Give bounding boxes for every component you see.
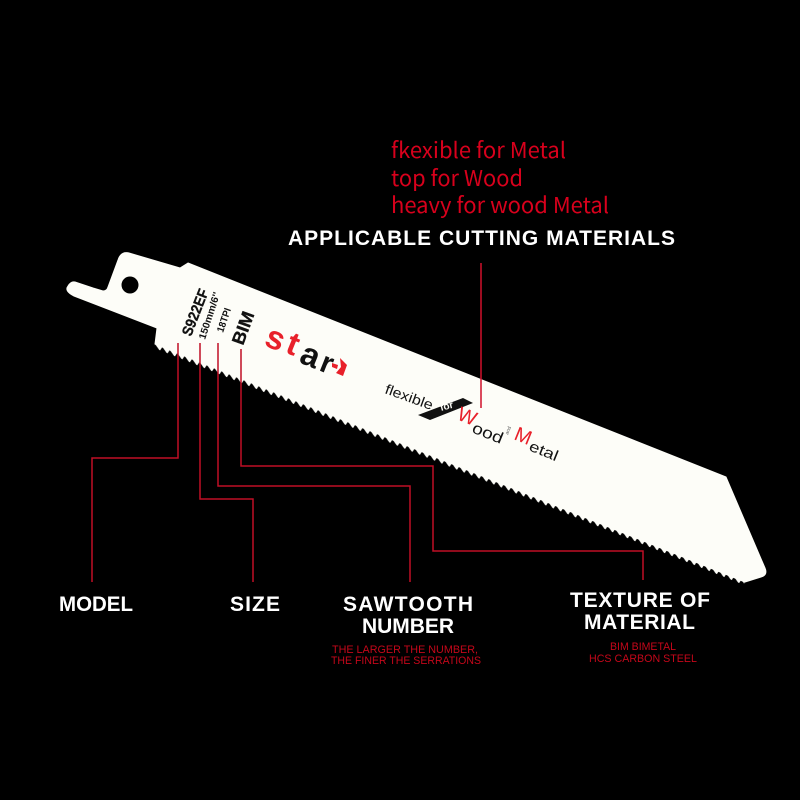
- label: texture of material: MATERIAL: [584, 611, 695, 634]
- brand logo: star: [260, 317, 347, 381]
- label: model: MODEL: [59, 593, 133, 616]
- label: size: SIZE: [230, 593, 280, 616]
- slogan: flexible for Wood and Metal: ood: [470, 420, 506, 448]
- label: texture of material: TEXTURE OF: [570, 589, 710, 612]
- material print: BIM: [228, 309, 258, 347]
- note: texture of material: BIM BIMETAL: [610, 641, 676, 653]
- leader line: texture of material: [241, 349, 643, 580]
- note: sawtooth number: THE LARGER THE NUMBER,: [332, 644, 478, 656]
- slogan: flexible for Wood and Metal: M: [511, 423, 535, 450]
- slogan: flexible for Wood and Metal: etal: [527, 438, 561, 465]
- slogan: flexible for Wood and Metal: flexible: [383, 381, 436, 413]
- leader line: sawtooth number: [218, 343, 410, 582]
- slogan: flexible for Wood and Metal: for: [439, 400, 455, 414]
- slogan: flexible for Wood and Metal: W: [454, 403, 480, 431]
- slogan: flexible for Wood and Metal: and: [504, 426, 513, 436]
- label: sawtooth number: [343, 593, 473, 638]
- note: texture of material: [589, 641, 697, 665]
- slogan: flexible for Wood and Metal: [383, 381, 561, 465]
- brand logo: star: s: [260, 317, 291, 358]
- saw teeth: [154, 344, 745, 585]
- tooth count print: 18TPI: [215, 307, 234, 334]
- leader line: model: [92, 343, 178, 582]
- leader line: applicable materials: [480, 263, 482, 408]
- heading: applicable cutting materials: APPLICABLE CUTTING MATERIALS: [288, 227, 675, 250]
- red list: blade uses: top for Wood: [391, 161, 523, 193]
- brand logo: star: r: [315, 346, 339, 381]
- red list: blade uses: [391, 133, 609, 220]
- mounting hole: [122, 276, 138, 294]
- label: texture of material: [570, 589, 710, 634]
- label: sawtooth number: NUMBER: [362, 615, 454, 638]
- brand logo: star: t: [281, 324, 305, 363]
- red list: blade uses: fkexible for Metal: [391, 133, 566, 165]
- note: sawtooth number: THE FINER THE SERRATIONS: [331, 655, 481, 667]
- saw blade: [67, 253, 766, 585]
- size print: 150mm/6'': [197, 291, 223, 341]
- leader line: size: [200, 343, 253, 582]
- blade body: [67, 253, 766, 582]
- red list: blade uses: heavy for wood Metal: [391, 188, 609, 220]
- model print: S922EF: [179, 287, 213, 338]
- brand logo: star: a: [295, 334, 327, 376]
- note: texture of material: HCS CARBON STEEL: [589, 653, 697, 665]
- note: sawtooth number: [331, 644, 481, 667]
- label: sawtooth number: SAWTOOTH: [343, 593, 473, 616]
